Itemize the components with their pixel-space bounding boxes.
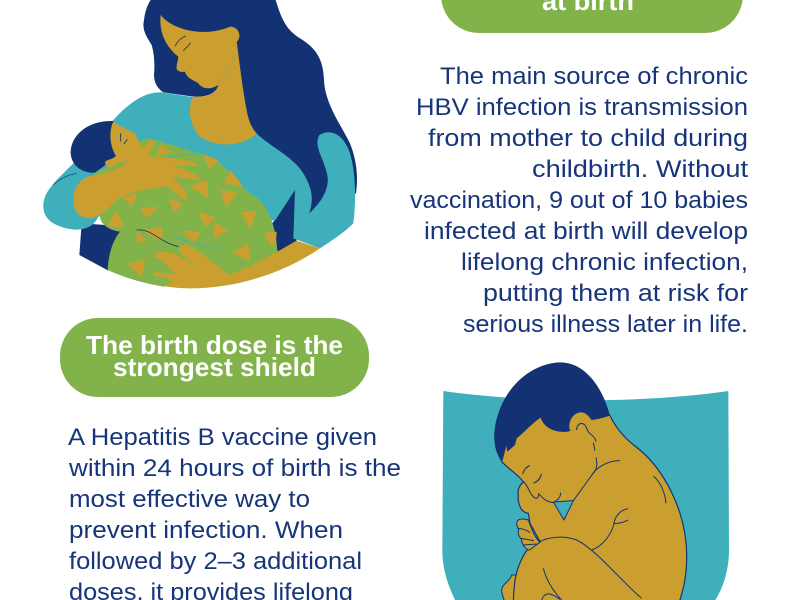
fist [517,519,540,550]
heading pill: birth dose: The birth dose is the [86,330,343,360]
newborn detail lines [517,424,666,600]
mother's face and neck [160,15,257,144]
facial lines [175,36,237,83]
teal shield [442,391,729,600]
illustration: mother holding swaddled baby [43,0,357,288]
text block: main source of chronic infection: HBV infection is transmission [416,94,748,121]
gap under chin [553,501,573,520]
swaddle triangles [109,146,276,275]
text block: main source of chronic infection: serious illness later in life. [463,311,748,338]
heading pill: birth dose [60,318,369,397]
swaddle fold lines [53,154,317,250]
newborn hair [494,362,610,462]
text block: birth dose vaccine: A Hepatitis B vaccine given [68,424,377,451]
text block: main source of chronic infection [410,63,748,338]
text block: birth dose vaccine: within 24 hours of birth is the [68,455,401,482]
text block: birth dose vaccine [68,424,401,600]
heading pill: at birth [441,0,743,33]
newborn body [502,383,687,600]
mother's shirt and arms [43,92,355,248]
ear [569,412,598,444]
baby's swaddle [93,138,283,287]
text block: main source of chronic infection: vaccination, 9 out of 10 babies [410,187,748,214]
baby-holding arm and hand [73,140,202,218]
text block: main source of chronic infection: infected at birth will develop [424,218,748,245]
text block: main source of chronic infection: childbirth. Without [532,156,748,183]
text block: birth dose vaccine: followed by 2–3 additional [69,548,362,575]
text block: main source of chronic infection: from mother to child during [428,125,748,152]
text block: main source of chronic infection: lifelong chronic infection, [461,249,748,276]
baby's head [71,121,145,173]
heading pill: birth dose: strongest shield [113,352,316,382]
lower hand and forearm [153,241,320,288]
illustration: curled newborn on teal shield [442,362,729,600]
mother's hair [143,0,357,217]
text block: birth dose vaccine: prevent infection. When [69,517,343,544]
text block: main source of chronic infection: The main source of chronic [440,63,748,90]
foot [502,575,517,600]
text block: birth dose vaccine: most effective way to [69,486,310,513]
text block: main source of chronic infection: putting them at risk for [483,280,748,307]
